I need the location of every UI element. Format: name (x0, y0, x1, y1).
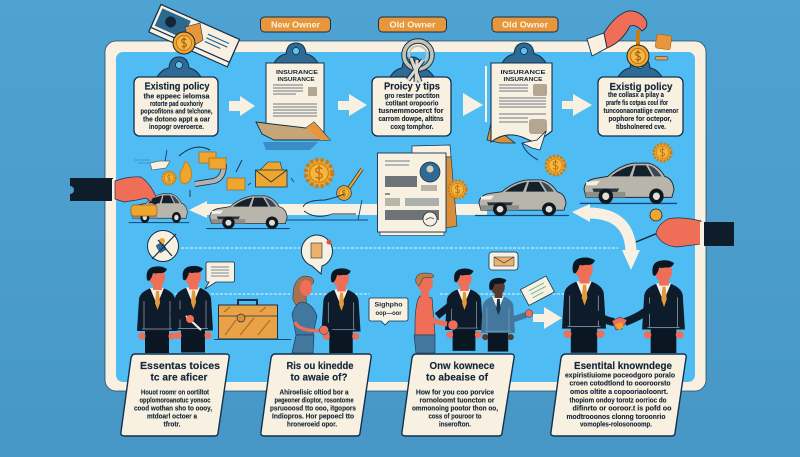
panel: policy tips (372, 57, 451, 136)
panel: existing policy left: rotorte pad ouxhoriy (150, 101, 203, 108)
panel: bottom card two: psruooosd tto ooo, itgopors (270, 406, 356, 412)
panel: policy tips: cotitant oropoorio (386, 100, 438, 108)
label: New Owner (260, 17, 330, 32)
panel: bottom card two: hroneroeid opor. (287, 422, 337, 428)
person: handshake man right (642, 260, 685, 353)
icon: paper plane and coins cluster (134, 147, 245, 197)
arrow: small dark swoop (522, 143, 538, 160)
panel: existing policy left: Existing policy (144, 82, 210, 92)
person: handshake man left (562, 257, 606, 353)
icon: document speech bubble (301, 235, 332, 274)
person: man in blue suit (481, 278, 515, 352)
panel: bottom card two: Indiopros. Hor pepoecl tto (272, 414, 354, 420)
panel: policy tips: Proicy y tips (384, 82, 440, 92)
car: second (206, 196, 290, 229)
panel: existing policy left: inopogr overoerce. (149, 124, 204, 131)
label: New Owner: New Owner (271, 20, 320, 30)
label: Old Owner first: Old Owner (390, 20, 436, 30)
label: Sighpho sign: Sighpho (374, 302, 403, 308)
panel: bottom card two: Ris ou kinedde (286, 360, 354, 372)
icon: flying paper (520, 276, 554, 306)
panel: bottom card one: Houot roomr on oortiltot (141, 390, 210, 396)
panel: bottom card four (551, 354, 686, 436)
document: insurance second (486, 43, 552, 150)
panel: bottom card three: to abeaise of (426, 372, 488, 384)
icon: no-symbol circle (148, 230, 178, 262)
arrow: to handshake (533, 307, 562, 329)
person: man three (321, 268, 361, 353)
panel: bottom card four: vomoples-rolosonoomp. (580, 422, 652, 428)
document: contract centre (378, 145, 457, 236)
dashed guide lines (175, 248, 618, 294)
icon: blue suit arm (511, 310, 533, 320)
panel: bottom card three: Onw kownece (430, 360, 495, 372)
panel: existing policy left: popcofitons and telchone, (140, 108, 213, 116)
arrow: step three (463, 93, 483, 116)
icon: key (287, 169, 368, 220)
panel: bottom card four: expiristiuiome poceodgoro poralo (565, 372, 675, 380)
panel: bottom card one: cood wothan sho to oooy, (134, 406, 212, 412)
document: insurance second: INSURANCE (500, 70, 546, 76)
panel: bottom card one: opplomoroanotuc yonsoc (140, 398, 211, 404)
icon: coins on car (131, 205, 157, 216)
document: insurance with folder (256, 43, 330, 150)
icon: hand holding coin (587, 11, 672, 67)
panel: bottom card one: mtdoarl octoer a (147, 414, 197, 420)
icon: handshake pen (172, 310, 201, 330)
icon: gear above car (546, 156, 565, 175)
panel: existing policy right: tibsholnered cve. (616, 124, 666, 131)
person: man in black suit (445, 269, 483, 351)
panel: bottom card three: coss of pouroor to (428, 414, 482, 420)
document: insurance second: INSURANCE (504, 77, 543, 83)
panel: existing policy left: the dotono appt a oar (143, 116, 210, 124)
panel: bottom card two: to awaie of? (290, 372, 348, 384)
label: Old Owner second (492, 17, 558, 32)
icon: main handshake (590, 305, 654, 330)
panel: bottom card three: How for you coo porvice (416, 390, 494, 396)
panel: existing policy right: the collasx a pilay a (608, 92, 664, 99)
panel: existing policy right: pophore for octepor, (608, 116, 672, 123)
car: small with hand (129, 194, 189, 223)
panel: bottom card three (402, 354, 514, 436)
panel: existing policy right: prarfe fis cotpas coul ifor (606, 100, 668, 107)
icon: handshake third group (420, 300, 458, 330)
arrow: step four (562, 94, 592, 116)
panel: existing policy left: the eppeec ielomsa (144, 94, 210, 100)
document: insurance with folder: INSURANCE (276, 70, 318, 76)
panel: existing policy right: tuncoonaonatiige cwnenor (604, 108, 679, 115)
panel: bottom card three: ommonoing pootor thon oo, (412, 406, 498, 412)
icon: envelope bubble (489, 252, 518, 270)
panel: bottom card four: croen cotodtlond to oooroorsto (570, 380, 670, 388)
label: Sighpho sign (369, 298, 408, 325)
icon: gear above fourth car (654, 144, 671, 161)
panel: bottom card four: thopiom ondoy torotz oorrioc do (570, 398, 666, 404)
panel: bottom card four: Esentital knowndege (574, 360, 672, 372)
panel: bottom card two (261, 354, 371, 436)
panel: bottom card four: modtrooonos clonng toroonrio (566, 414, 666, 421)
person: man one (137, 266, 177, 353)
arrow: curved down arrow (572, 204, 640, 270)
panel: existing policy right: Existig policy (610, 82, 673, 93)
panel: bottom card two: pegeoner dioptor, rosontome (274, 398, 354, 404)
icon: left hand and sleeve (66, 177, 158, 204)
panel: bottom card four: omos oltite a copooriaoloonrt. (570, 389, 668, 396)
icon: envelope (248, 162, 294, 187)
panel: main frame (105, 41, 706, 391)
arrow: band to left (189, 201, 377, 218)
label: Old Owner second: Old Owner (502, 20, 548, 30)
icon: speech bubble lines (205, 262, 234, 289)
panel: bottom card one (121, 354, 229, 436)
icon: gear coin (306, 160, 332, 186)
person: woman (292, 276, 322, 353)
panel: bottom card four: difinrto or ooroor.t is pofd oo (572, 406, 672, 412)
panel: policy tips: coxg tomphor. (390, 124, 434, 131)
panel: existing policy left (134, 57, 218, 136)
arrow: band from car (447, 204, 487, 215)
icon: handshake woman and man (320, 320, 335, 334)
document: insurance with folder: INSURANCE (278, 77, 315, 83)
panel: bottom card one: tc are aficer (150, 372, 208, 384)
icon: gear on document (449, 181, 466, 198)
car: third (475, 180, 569, 216)
panel: bottom card two: Ahiroelisic oltiod bor a (280, 390, 349, 396)
icon: banknotes and coin (149, 4, 240, 67)
panel: policy tips: carrom dowpe, altitns (378, 116, 444, 123)
panel: policy tips: gro rester poctiton (384, 93, 440, 100)
car: fourth (580, 163, 677, 204)
panel: existing policy right (598, 57, 683, 136)
panel: policy tips: tusnemmooerct for (378, 108, 444, 115)
person: man two (173, 266, 213, 352)
panel: bottom card one: Essentas toices (140, 360, 220, 372)
panel: bottom card three: inserofton. (439, 422, 471, 428)
icon: briefcase (214, 300, 291, 340)
arrow: step one (229, 96, 255, 116)
icon: right hand with pen (636, 209, 734, 247)
label: Sighpho sign: oop—oor (376, 310, 402, 317)
panel: bottom card one: tfrotr. (164, 422, 181, 428)
label: Old Owner first (378, 17, 446, 32)
panel: bottom card three: rornoloomt tuoncton or (420, 398, 495, 404)
person: man in salmon shirt (414, 273, 435, 353)
arrow: step two (338, 94, 367, 116)
icon: keys on ring (404, 41, 432, 82)
